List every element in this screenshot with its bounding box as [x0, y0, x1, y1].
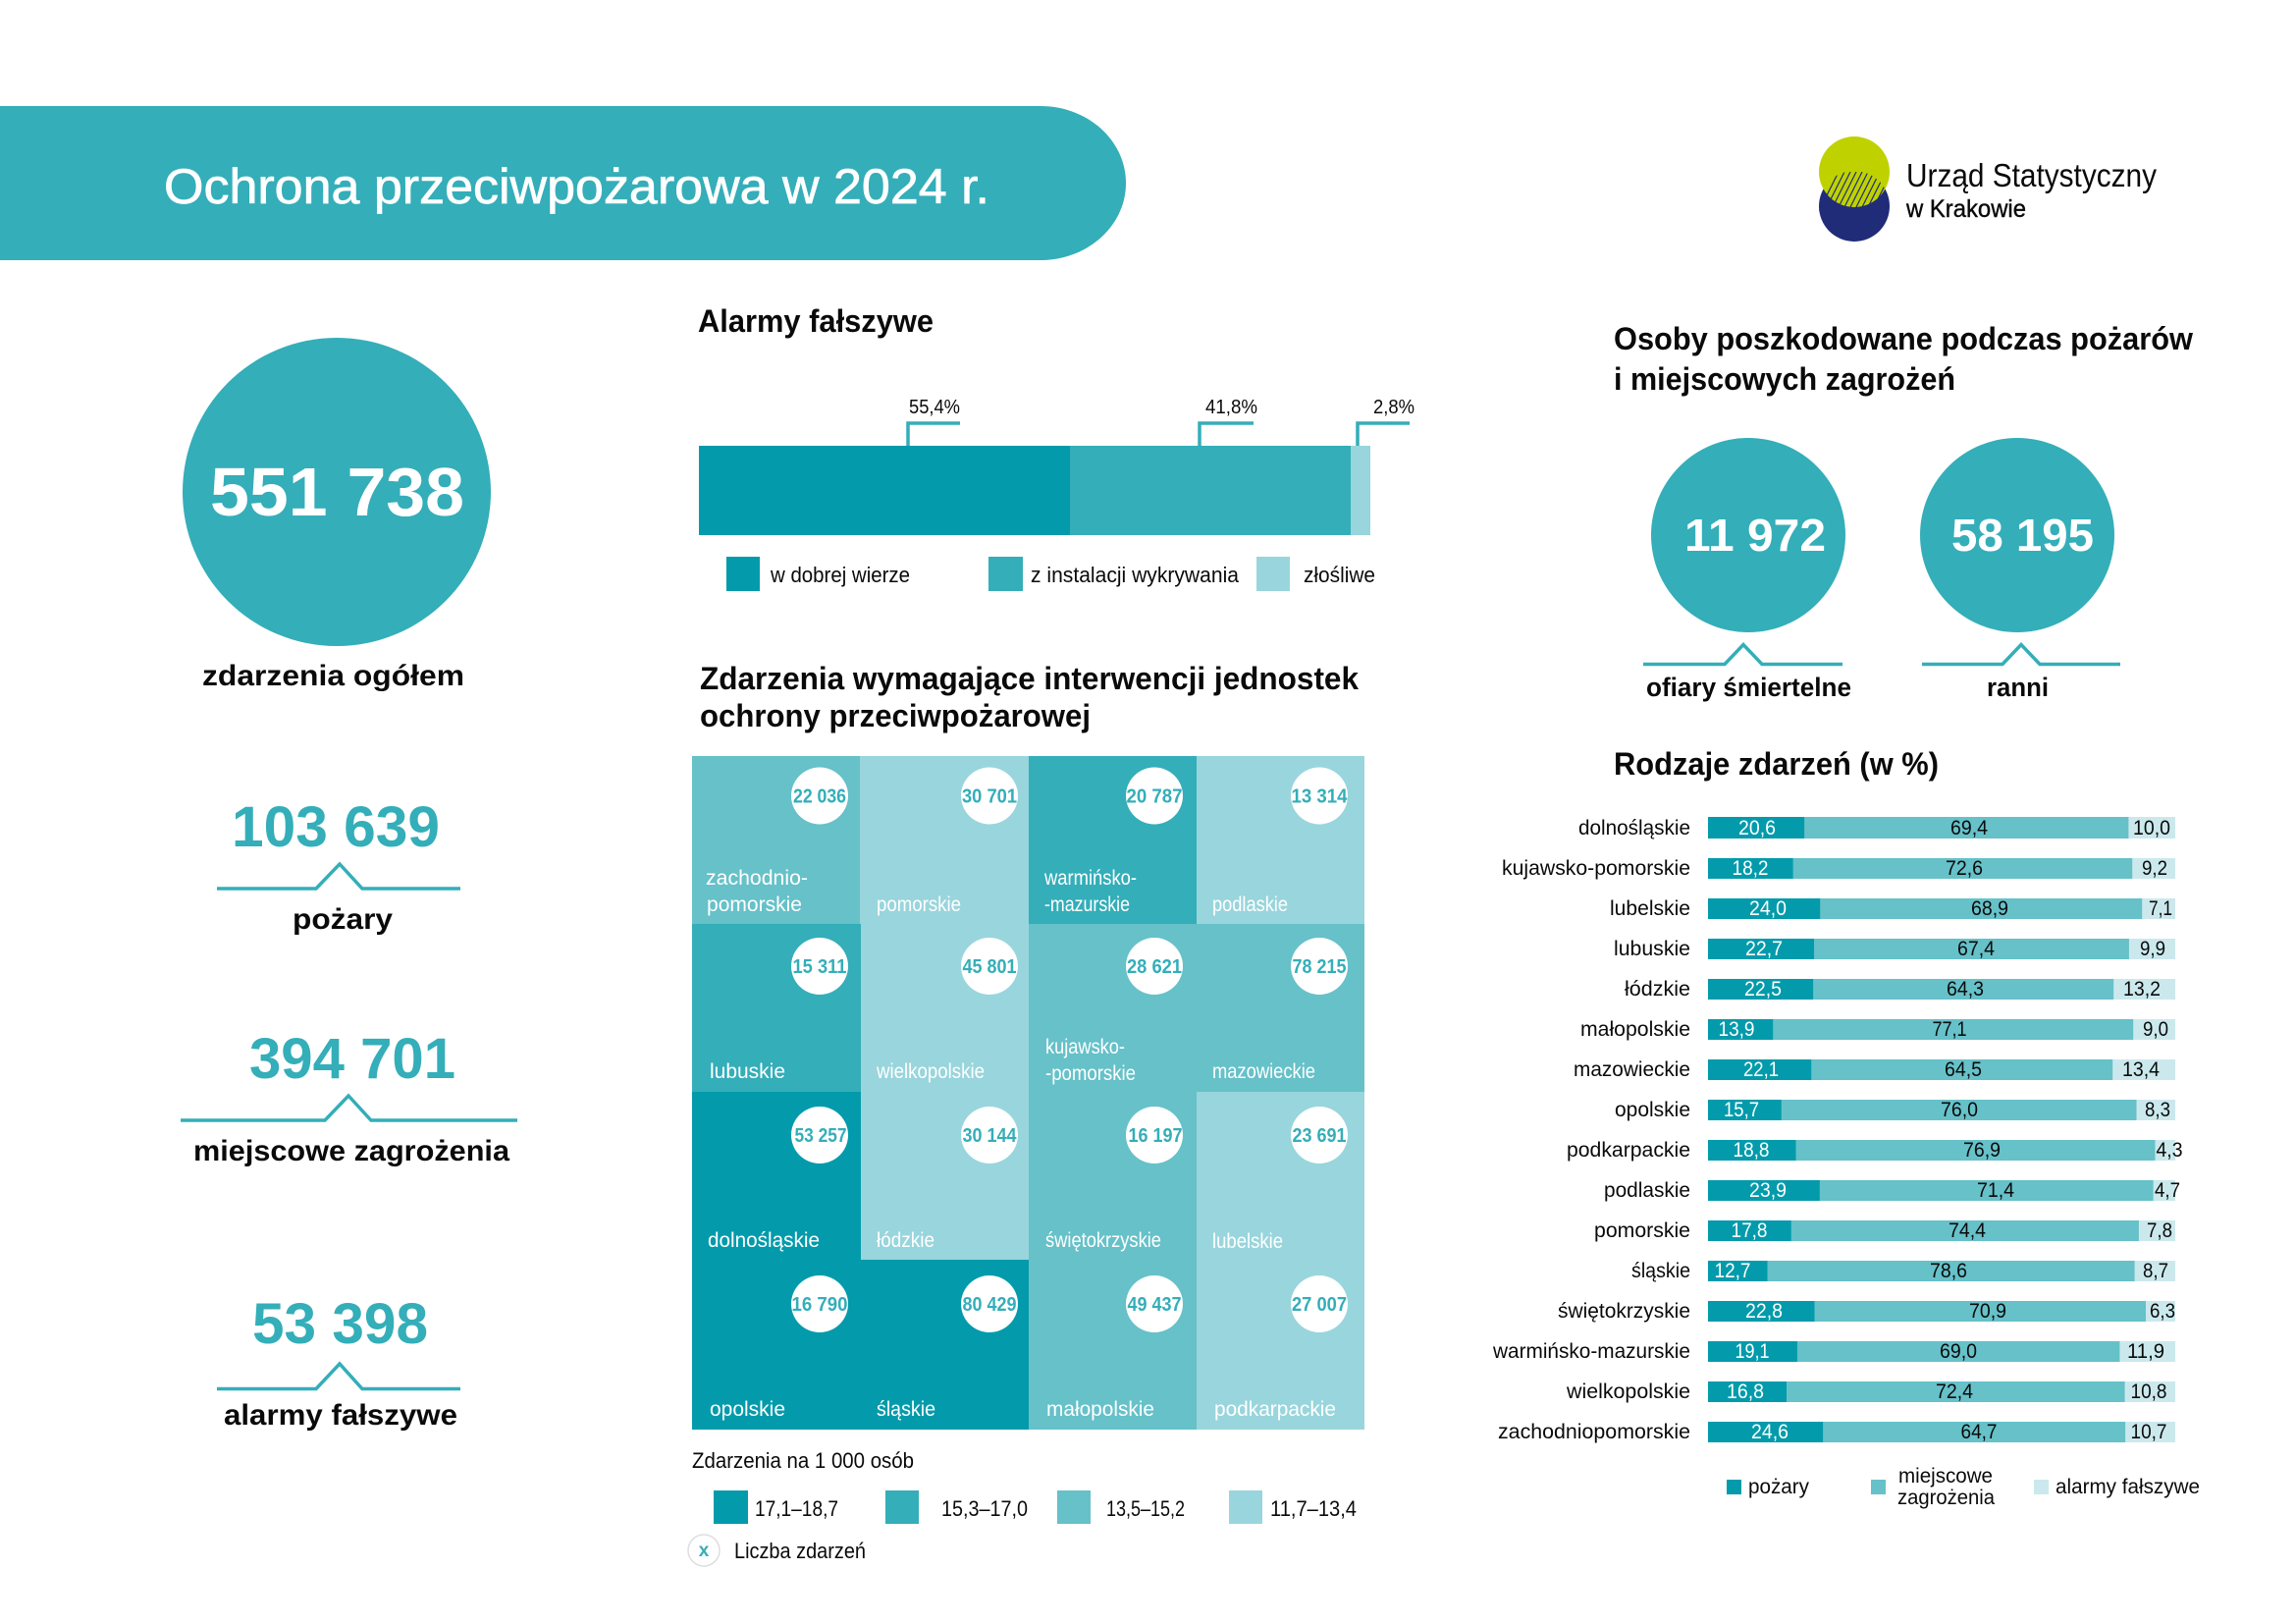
tile: lubelskie: 23 691 — [1292, 1125, 1347, 1147]
tile: wielkopolskie — [861, 924, 1029, 1092]
legend — [726, 557, 1375, 591]
tile: łódzkie: 30 144 — [962, 1125, 1017, 1147]
row: małopolskie — [1580, 1018, 2175, 1041]
row: kujawsko-pomorskie: 18,2 — [1732, 857, 1769, 880]
row: kujawsko-pomorskie: 9,2 — [2142, 857, 2167, 880]
row: dolnośląskie: dolnośląskie — [1578, 817, 1690, 839]
tile: małopolskie: 49 437 — [1127, 1294, 1182, 1316]
row: łódzkie: łódzkie — [1625, 978, 1690, 1001]
tile: zachodniopomorskie: pomorskie — [707, 893, 802, 916]
row: mazowieckie: 64,5 — [1945, 1058, 1982, 1081]
tile: lubelskie: lubelskie — [1212, 1230, 1283, 1253]
tile: łódzkie — [861, 1092, 1029, 1261]
row: opolskie: opolskie — [1615, 1099, 1690, 1121]
legend: stacked bars: pożary — [1748, 1476, 1809, 1498]
stat: injured: ranni — [1987, 673, 2049, 702]
tile: podkarpackie: podkarpackie — [1214, 1398, 1336, 1421]
heading: interventions: ochrony przeciwpożarowej — [700, 698, 1091, 733]
row: zachodniopomorskie: zachodniopomorskie — [1498, 1421, 1690, 1443]
row: warmińsko-mazurskie: warmińsko-mazurskie — [1492, 1340, 1690, 1363]
row: warmińsko-mazurskie: 69,0 — [1940, 1340, 1977, 1363]
tile: kujawsko-pomorskie — [1029, 924, 1198, 1092]
row: lubuskie: 22,7 — [1745, 938, 1783, 960]
tile: opolskie — [692, 1260, 861, 1430]
row: łódzkie: 22,5 — [1744, 978, 1782, 1001]
tile: podlaskie: podlaskie — [1212, 893, 1288, 916]
tile chart: voivodeships — [692, 756, 1364, 1430]
tile: małopolskie: małopolskie — [1046, 1398, 1154, 1421]
tile: wielkopolskie: 45 801 — [962, 956, 1017, 978]
legend: z instalacji wykrywania — [1031, 563, 1240, 587]
row: pomorskie: 17,8 — [1732, 1219, 1767, 1242]
row: śląskie: 8,7 — [2143, 1260, 2168, 1282]
row: podkarpackie: 76,9 — [1963, 1139, 2001, 1162]
row: zachodniopomorskie: 10,7 — [2130, 1421, 2167, 1443]
tile: dolnośląskie: 53 257 — [795, 1125, 846, 1147]
row: lubelskie: lubelskie — [1610, 897, 1690, 920]
tile: kujawsko-pomorskie: kujawsko- — [1045, 1036, 1125, 1058]
row: pomorskie: 74,4 — [1949, 1219, 1986, 1242]
stacked bars: event types by voivodeship — [1492, 817, 2183, 1443]
stacked bar — [699, 446, 1370, 535]
row: wielkopolskie: 10,8 — [2130, 1380, 2167, 1403]
row: podlaskie — [1604, 1179, 2180, 1202]
stat: local hazards: miejscowe zagrożenia — [193, 1135, 509, 1167]
row: dolnośląskie: 20,6 — [1738, 817, 1776, 839]
value callouts: 41,8% — [1205, 397, 1257, 418]
heading: casualties: i miejscowych zagrożeń — [1614, 361, 1955, 397]
row: zachodniopomorskie: 64,7 — [1961, 1421, 1997, 1443]
tile: mazowieckie: mazowieckie — [1212, 1060, 1315, 1083]
tile: warmińsko-mazurskie — [1029, 756, 1198, 925]
tile: pomorskie — [860, 756, 1029, 925]
heading: casualties: Osoby poszkodowane podczas pożarów — [1614, 321, 2193, 356]
row: świętokrzyskie: 70,9 — [1969, 1300, 2006, 1323]
row: opolskie: 76,0 — [1941, 1099, 1978, 1121]
row: łódzkie: 13,2 — [2123, 978, 2161, 1001]
stat: fatalities: 11 972 — [1684, 510, 1826, 561]
tile: lubuskie: 15 311 — [793, 956, 846, 978]
panel: false alarms bar — [698, 303, 1415, 591]
legend: tile chart: 15,3–17,0 — [941, 1496, 1028, 1521]
row: lubuskie: 9,9 — [2140, 938, 2165, 960]
row: opolskie: 15,7 — [1724, 1099, 1759, 1121]
value callouts: 55,4% — [909, 397, 960, 418]
row: kujawsko-pomorskie — [1502, 857, 2175, 880]
legend: tile chart — [688, 1448, 1357, 1566]
legend: stacked bars — [1727, 1465, 2200, 1509]
row: śląskie: śląskie — [1631, 1260, 1690, 1282]
row: warmińsko-mazurskie: 11,9 — [2127, 1340, 2164, 1363]
row: podkarpackie: 4,3 — [2156, 1139, 2183, 1162]
row: opolskie: 8,3 — [2145, 1099, 2170, 1121]
panel: total events: zdarzenia ogółem — [202, 660, 464, 692]
row: lubuskie: lubuskie — [1614, 938, 1690, 960]
tile: świętokrzyskie: świętokrzyskie — [1045, 1229, 1161, 1252]
row: świętokrzyskie: 22,8 — [1745, 1300, 1783, 1323]
tile: podkarpackie — [1197, 1260, 1364, 1430]
heading: event types: Rodzaje zdarzeń (w %) — [1614, 746, 1939, 782]
tile: lubelskie — [1197, 1092, 1364, 1261]
tile: warmińsko-mazurskie: warmińsko- — [1043, 867, 1137, 890]
tile: warmińsko-mazurskie: 20 787 — [1127, 785, 1182, 807]
row: lubelskie: 24,0 — [1749, 897, 1787, 920]
legend: stacked bars: miejscowe — [1898, 1465, 1993, 1488]
tile: pomorskie: pomorskie — [877, 893, 961, 916]
row: śląskie — [1631, 1260, 2175, 1282]
row: mazowieckie: 13,4 — [2122, 1058, 2160, 1081]
tile: podlaskie — [1197, 756, 1364, 925]
panel: casualties — [1614, 321, 2193, 702]
row: dolnośląskie: 69,4 — [1950, 817, 1988, 839]
row: kujawsko-pomorskie: kujawsko-pomorskie — [1502, 857, 1690, 880]
tile: dolnośląskie — [692, 1092, 861, 1261]
row: pomorskie: pomorskie — [1594, 1219, 1690, 1242]
tile: pomorskie: 30 701 — [962, 785, 1017, 807]
stat: fatalities: ofiary śmiertelne — [1646, 673, 1851, 702]
row: lubelskie — [1610, 897, 2175, 920]
stat: fires: pożary — [293, 903, 393, 936]
row: podkarpackie: 18,8 — [1734, 1139, 1769, 1162]
tile: warmińsko-mazurskie: -mazurskie — [1044, 893, 1130, 916]
tile: podlaskie: 13 314 — [1292, 785, 1348, 807]
tile: kujawsko-pomorskie: -pomorskie — [1045, 1062, 1136, 1085]
legend: tile chart: 17,1–18,7 — [755, 1496, 838, 1521]
heading: interventions: Zdarzenia wymagające interwencji jednostek — [700, 661, 1359, 696]
row: wielkopolskie: 16,8 — [1727, 1380, 1764, 1403]
tile: opolskie: opolskie — [710, 1398, 785, 1421]
row: małopolskie: 9,0 — [2143, 1018, 2168, 1041]
tile: mazowieckie: 78 215 — [1292, 956, 1347, 978]
row: małopolskie: małopolskie — [1580, 1018, 1690, 1041]
stat: local hazards: 394 701 — [249, 1027, 455, 1091]
row: mazowieckie: 22,1 — [1743, 1058, 1779, 1081]
row: podlaskie: podlaskie — [1604, 1179, 1690, 1202]
row: małopolskie: 13,9 — [1718, 1018, 1755, 1041]
heading: casualties — [1614, 321, 2193, 397]
tile: śląskie: śląskie — [877, 1398, 935, 1421]
stat: fires — [217, 795, 460, 936]
value callouts: 2,8% — [1373, 397, 1415, 418]
legend: tile chart: Liczba zdarzeń — [734, 1539, 866, 1563]
legend: stacked bars: zagrożenia — [1897, 1487, 1995, 1509]
heading: Alarmy fałszywe: Alarmy fałszywe — [698, 303, 934, 339]
row: dolnośląskie — [1578, 817, 2175, 839]
row: warmińsko-mazurskie: 19,1 — [1735, 1340, 1769, 1363]
heading: interventions — [700, 661, 1359, 733]
row: pomorskie: 7,8 — [2147, 1219, 2172, 1242]
row: podkarpackie: podkarpackie — [1567, 1139, 1690, 1162]
tile: mazowieckie — [1197, 924, 1364, 1092]
tile: śląskie: 80 429 — [962, 1294, 1017, 1316]
row: wielkopolskie: 72,4 — [1936, 1380, 1973, 1403]
tile: małopolskie — [1029, 1260, 1198, 1430]
row: lubuskie — [1614, 938, 2175, 960]
stat: injured: 58 195 — [1951, 510, 2094, 561]
row: lubuskie: 67,4 — [1957, 938, 1995, 960]
stat: false alarms: alarmy fałszywe — [224, 1399, 457, 1432]
panel: total events: 551 738 — [210, 454, 464, 530]
row: wielkopolskie: wielkopolskie — [1566, 1380, 1690, 1403]
row: lubelskie: 7,1 — [2149, 897, 2172, 920]
row: świętokrzyskie — [1558, 1300, 2175, 1323]
tile: zachodniopomorskie: zachodnio- — [706, 867, 808, 890]
row: łódzkie — [1625, 978, 2175, 1001]
tile: łódzkie: łódzkie — [877, 1229, 934, 1252]
tile: wielkopolskie: wielkopolskie — [876, 1060, 985, 1083]
row: małopolskie: 77,1 — [1932, 1018, 1967, 1041]
tile: zachodniopomorskie: 22 036 — [793, 785, 846, 807]
row: świętokrzyskie: świętokrzyskie — [1558, 1300, 1690, 1323]
legend: złośliwe — [1304, 563, 1375, 587]
tile: kujawsko-pomorskie: 28 621 — [1127, 956, 1182, 978]
tile: dolnośląskie: dolnośląskie — [708, 1229, 820, 1252]
panel: total events — [183, 338, 491, 692]
row: podlaskie: 4,7 — [2155, 1179, 2180, 1202]
row: lubelskie: 68,9 — [1971, 897, 2008, 920]
title banner — [0, 106, 1126, 260]
row: świętokrzyskie: 6,3 — [2150, 1300, 2175, 1323]
tile: lubuskie: lubuskie — [710, 1060, 785, 1083]
row: mazowieckie: mazowieckie — [1574, 1058, 1690, 1081]
stat: false alarms: 53 398 — [252, 1292, 428, 1356]
row: opolskie — [1615, 1099, 2175, 1121]
row: podlaskie: 23,9 — [1749, 1179, 1787, 1202]
stat: fires: 103 639 — [232, 795, 440, 859]
legend: stacked bars: alarmy fałszywe — [2056, 1476, 2200, 1498]
row: zachodniopomorskie — [1498, 1421, 2175, 1443]
row: podlaskie: 71,4 — [1977, 1179, 2014, 1202]
title banner: Ochrona przeciwpożarowa w 2024 r. — [164, 159, 989, 214]
logo: Urząd Statystyczny w Krakowie — [1819, 136, 2157, 242]
legend: w dobrej wierze — [770, 563, 910, 587]
row: warmińsko-mazurskie — [1492, 1340, 2175, 1363]
value callouts — [908, 397, 1415, 446]
tile: śląskie — [861, 1260, 1029, 1430]
row: wielkopolskie — [1566, 1380, 2175, 1403]
tile: opolskie: 16 790 — [791, 1294, 848, 1316]
tile: zachodniopomorskie — [692, 756, 860, 925]
stat: fatalities — [1643, 438, 1851, 702]
tile: świętokrzyskie: 16 197 — [1129, 1125, 1182, 1147]
legend: tile chart: 13,5–15,2 — [1106, 1496, 1185, 1521]
legend: tile chart: 11,7–13,4 — [1270, 1496, 1357, 1521]
row: podkarpackie — [1567, 1139, 2183, 1162]
logo: Urząd Statystyczny w Krakowie: Urząd Statystyczny — [1906, 157, 2157, 193]
row: łódzkie: 64,3 — [1947, 978, 1984, 1001]
tile: świętokrzyskie — [1029, 1092, 1198, 1261]
row: kujawsko-pomorskie: 72,6 — [1946, 857, 1983, 880]
row: zachodniopomorskie: 24,6 — [1751, 1421, 1789, 1443]
row: mazowieckie — [1574, 1058, 2175, 1081]
row: śląskie: 78,6 — [1930, 1260, 1967, 1282]
tile: lubuskie — [692, 924, 861, 1092]
legend: tile chart: Zdarzenia na 1 000 osób — [692, 1448, 914, 1473]
stat: false alarms — [217, 1292, 460, 1432]
row: dolnośląskie: 10,0 — [2133, 817, 2170, 839]
logo: Urząd Statystyczny w Krakowie: w Krakowie — [1905, 195, 2026, 223]
row: śląskie: 12,7 — [1714, 1260, 1751, 1282]
row: pomorskie — [1594, 1219, 2175, 1242]
tile: podkarpackie: 27 007 — [1292, 1294, 1347, 1316]
stat: local hazards — [181, 1027, 517, 1167]
stat: injured — [1920, 438, 2120, 702]
legend: tile chart: x — [699, 1541, 710, 1561]
